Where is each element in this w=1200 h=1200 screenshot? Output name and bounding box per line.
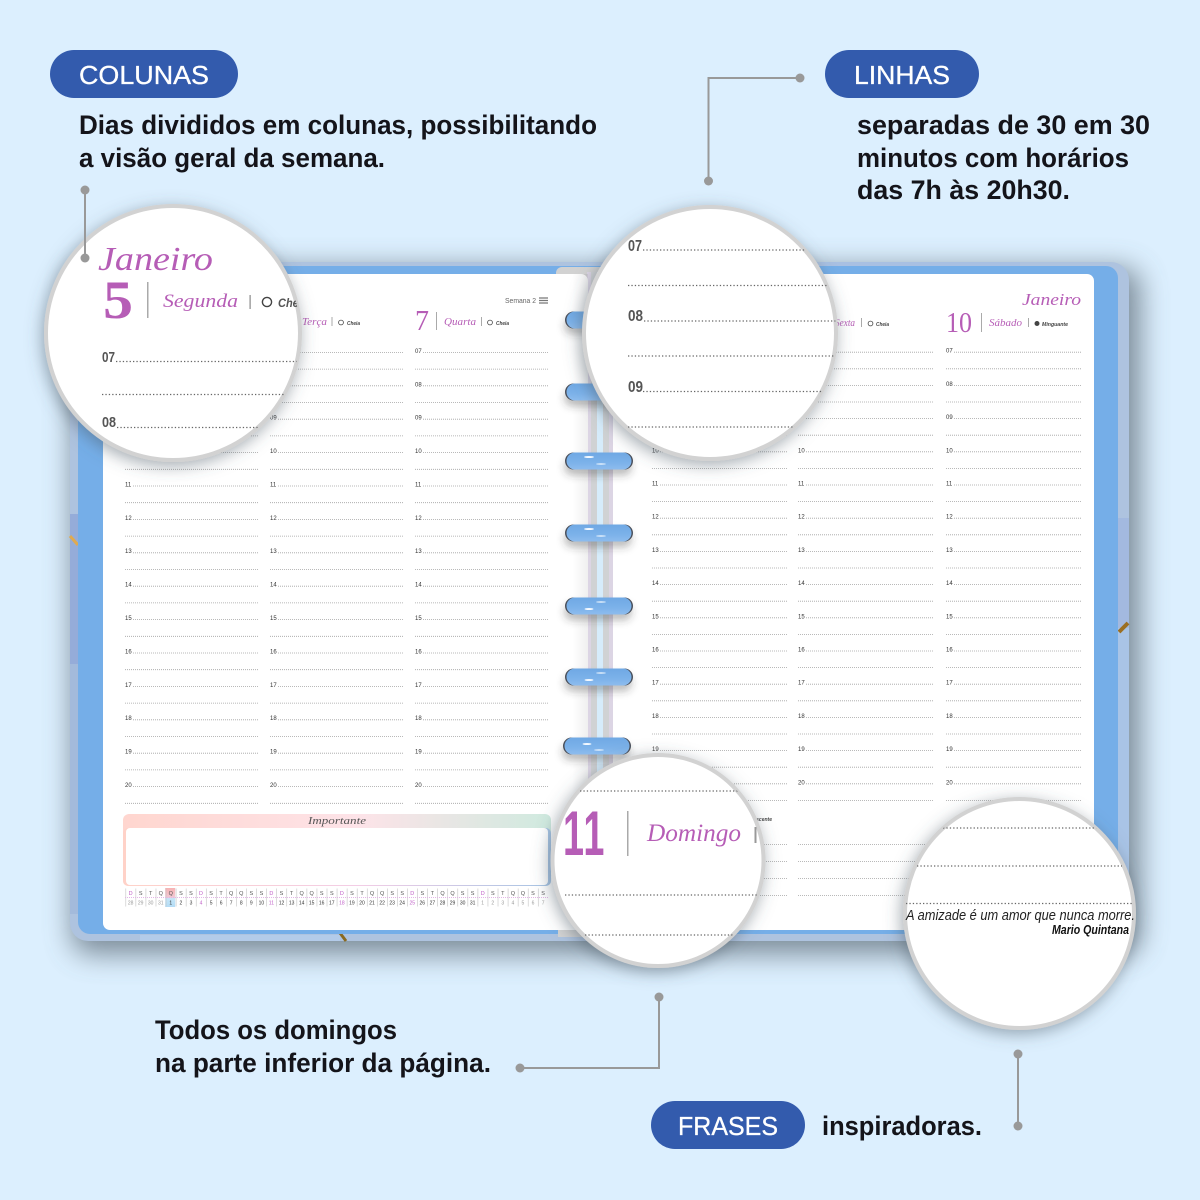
weekday letters: S xyxy=(400,891,404,897)
callout: linhas xyxy=(704,50,1150,205)
dotted lines xyxy=(628,250,839,427)
date numbers: 16 xyxy=(319,900,325,906)
right page hour labels: 13 xyxy=(652,548,659,554)
pill: colunas xyxy=(50,50,238,98)
weekday letters: T xyxy=(290,891,294,897)
tuesday header xyxy=(302,317,360,328)
right page hour labels: 07 xyxy=(652,349,659,355)
left page dotted hour lines xyxy=(125,352,548,803)
weekday letters: S xyxy=(320,891,324,897)
ring 7 xyxy=(563,738,631,754)
date numbers: 22 xyxy=(379,900,385,906)
tuesday header: Terça xyxy=(302,317,327,328)
right page hour labels: 17 xyxy=(946,681,953,687)
left page hour labels: 11 xyxy=(415,482,422,488)
left page hour labels: 16 xyxy=(270,649,277,655)
right page hour labels: 17 xyxy=(652,681,659,687)
day divider xyxy=(627,811,628,856)
mini calendar strip xyxy=(125,888,548,907)
left page hour labels: 10 xyxy=(125,449,132,455)
connector: frases xyxy=(1014,1050,1022,1130)
left page hour labels: 07 xyxy=(270,349,277,355)
date numbers: 7 xyxy=(542,900,545,906)
weekday letters: Q xyxy=(380,891,385,897)
left page hour labels: 13 xyxy=(125,549,132,555)
pill: frases: FRASES xyxy=(678,1111,778,1141)
right page hour labels: 18 xyxy=(798,714,805,720)
day divider xyxy=(147,282,148,318)
callout: domingos xyxy=(155,992,664,1078)
dotted lines xyxy=(906,828,1134,904)
hour 08: 08 xyxy=(102,414,116,431)
right page hour labels: 11 xyxy=(652,482,659,488)
right page hour labels: 09 xyxy=(946,415,953,421)
moon divider xyxy=(250,295,251,309)
weekday letters: S xyxy=(249,891,253,897)
date numbers: 15 xyxy=(309,900,315,906)
left page hour labels: 19 xyxy=(415,750,422,756)
hour 09: 09 xyxy=(628,379,643,396)
day number 11: 11 xyxy=(563,799,604,870)
date numbers: 29 xyxy=(450,900,455,906)
right page hour labels: 19 xyxy=(652,747,659,753)
left page hour labels: 15 xyxy=(270,616,277,622)
text: colunas description: a visão geral da semana. xyxy=(79,143,385,173)
date numbers: 4 xyxy=(200,900,203,906)
left page hour labels: 08 xyxy=(415,382,422,388)
date numbers: 3 xyxy=(501,900,504,906)
left page hour labels: 08 xyxy=(270,382,277,388)
date numbers: 10 xyxy=(259,900,264,906)
friday header: Cheia xyxy=(876,322,889,328)
weekday letters: Q xyxy=(310,891,315,897)
magnifier: sunday xyxy=(552,755,764,966)
weekday letters: Q xyxy=(229,891,234,897)
left page hour labels: 18 xyxy=(125,716,132,722)
ring 2 xyxy=(565,384,632,400)
weekday name: Domingo xyxy=(646,820,741,847)
left page hour labels: 09 xyxy=(125,416,132,422)
right page hour labels: 19 xyxy=(798,747,805,753)
text: linhas description: minutos com horários xyxy=(857,143,1129,173)
date numbers: 31 xyxy=(158,900,164,906)
left page hour labels: 08 xyxy=(125,382,132,388)
date numbers: 13 xyxy=(289,900,295,906)
weekday letters: S xyxy=(350,891,354,897)
saturday header: Minguante xyxy=(1042,322,1068,328)
ring 4 xyxy=(565,524,633,542)
right page hour labels: 13 xyxy=(946,548,953,554)
sunday section lines xyxy=(652,844,934,896)
weekday letters: Q xyxy=(159,891,164,897)
right page hour labels: 09 xyxy=(652,415,659,421)
weekday letters: S xyxy=(139,891,143,897)
wednesday header: Quarta xyxy=(444,317,476,328)
weekday letters: S xyxy=(209,891,213,897)
wednesday header: Cheia xyxy=(496,321,509,327)
right page hour labels: 18 xyxy=(946,714,953,720)
date numbers: 28 xyxy=(440,900,445,906)
left page column headers xyxy=(302,296,548,337)
left page hour labels: 12 xyxy=(415,516,422,522)
callout: colunas xyxy=(50,50,597,262)
right page hour labels: 10 xyxy=(652,448,659,454)
ring 1 xyxy=(565,312,632,328)
weekday letters: S xyxy=(179,891,183,897)
left page hour labels: 17 xyxy=(125,683,132,689)
friday header xyxy=(835,318,889,329)
weekday letters: T xyxy=(149,891,153,897)
left page hour labels: 11 xyxy=(125,482,132,488)
ring 5 xyxy=(565,598,633,614)
left page hour labels: 14 xyxy=(415,583,422,589)
left page hour labels: 13 xyxy=(270,549,277,555)
importante box: Importante xyxy=(307,815,366,827)
right page hour labels: 19 xyxy=(946,747,953,753)
left page hour labels: 14 xyxy=(125,583,132,589)
date numbers: 6 xyxy=(532,900,535,906)
date numbers: 25 xyxy=(410,900,415,906)
weekday letters: S xyxy=(491,891,495,897)
left page hour labels: 15 xyxy=(415,616,422,622)
planner book xyxy=(70,262,1140,954)
left page hour labels: 12 xyxy=(125,516,132,522)
wednesday header xyxy=(415,305,509,337)
date numbers: 2 xyxy=(180,900,183,906)
right page hour labels: 10 xyxy=(946,448,953,454)
weekday letters: D xyxy=(269,891,273,897)
date numbers: 14 xyxy=(299,900,305,906)
right page hour labels: 11 xyxy=(946,482,953,488)
date numbers: 17 xyxy=(329,900,335,906)
right page hour labels: 08 xyxy=(652,382,659,388)
date numbers: 1 xyxy=(169,900,172,906)
right page hour labels: 12 xyxy=(798,515,805,521)
right page hour labels: 12 xyxy=(652,515,659,521)
magnifier: lines xyxy=(584,207,839,459)
quote text: A amizade é um amor que nunca morre. xyxy=(905,907,1135,924)
right page dotted hour lines xyxy=(652,352,1082,800)
text: domingos description xyxy=(155,1015,491,1078)
left page hour labels: 15 xyxy=(125,616,132,622)
left page hour labels: 20 xyxy=(270,783,277,789)
text: linhas description: separadas de 30 em 30 xyxy=(857,110,1150,140)
weekday letters: D xyxy=(410,891,414,897)
left page hour labels: 18 xyxy=(270,716,277,722)
quote author: Mario Quintana xyxy=(1052,922,1129,937)
date numbers: 23 xyxy=(389,900,395,906)
pill: linhas xyxy=(825,50,979,98)
left page hour labels: 17 xyxy=(415,683,422,689)
saturday header: 10 xyxy=(946,307,972,339)
right page hour labels: 20 xyxy=(652,780,659,786)
date numbers: 19 xyxy=(349,900,355,906)
magnifier: columns xyxy=(46,206,308,460)
weekday letters: S xyxy=(471,891,475,897)
right page hour labels: 18 xyxy=(652,714,659,720)
date numbers: 30 xyxy=(148,900,154,906)
importante box xyxy=(123,814,551,886)
pill: frases xyxy=(651,1101,805,1149)
weekday letters: Q xyxy=(299,891,304,897)
right page hour labels: 09 xyxy=(798,415,805,421)
date numbers: 29 xyxy=(138,900,144,906)
ring 3 xyxy=(565,452,633,470)
right page hour labels: 16 xyxy=(652,648,659,654)
left page hour labels: 14 xyxy=(270,583,277,589)
left page hour labels: 20 xyxy=(125,783,132,789)
right page hour labels: 15 xyxy=(798,614,805,620)
date numbers: 8 xyxy=(240,900,243,906)
weekday letters: S xyxy=(420,891,424,897)
text: domingos description: na parte inferior da página. xyxy=(155,1048,491,1078)
date numbers: 6 xyxy=(220,900,223,906)
date numbers: 12 xyxy=(279,900,284,906)
date numbers: 5 xyxy=(210,900,213,906)
right page xyxy=(613,274,1094,930)
friday header: Sexta xyxy=(835,318,855,329)
weekday letters: Q xyxy=(521,891,526,897)
right page hour labels: 08 xyxy=(946,382,953,388)
right page hour labels: 14 xyxy=(946,581,953,587)
magnifier: quote xyxy=(905,799,1135,1028)
weekday letters: T xyxy=(360,891,364,897)
text: colunas description: Dias divididos em colunas, possibilitando xyxy=(79,110,597,140)
weekday letters: D xyxy=(481,891,485,897)
weekday letters: S xyxy=(330,891,334,897)
weekday letters: Q xyxy=(450,891,455,897)
month title: Janeiro xyxy=(98,241,213,278)
date numbers: 5 xyxy=(522,900,525,906)
pill: colunas: COLUNAS xyxy=(79,60,209,90)
moon icon xyxy=(262,297,272,307)
book cover xyxy=(70,262,1129,941)
day number 5: 5 xyxy=(103,270,133,330)
left page hour labels: 19 xyxy=(125,750,132,756)
text: domingos description: Todos os domingos xyxy=(155,1015,397,1045)
weekday letters: S xyxy=(390,891,394,897)
text: inspiradoras: inspiradoras. xyxy=(822,1111,982,1141)
left page hour labels: 10 xyxy=(415,449,422,455)
date numbers: 31 xyxy=(470,900,476,906)
weekday letters: S xyxy=(531,891,535,897)
right page hour labels xyxy=(652,349,953,786)
right page hour labels: 20 xyxy=(798,780,805,786)
weekday letters: D xyxy=(340,891,344,897)
right page hour labels: 13 xyxy=(798,548,805,554)
dotted lines xyxy=(102,362,301,428)
date numbers: 2 xyxy=(491,900,494,906)
date numbers: 18 xyxy=(339,900,345,906)
date numbers: 21 xyxy=(369,900,375,906)
connector: domingos xyxy=(516,992,664,1072)
date numbers: 30 xyxy=(460,900,466,906)
date numbers: 27 xyxy=(430,900,435,906)
right page hour labels: 15 xyxy=(652,614,659,620)
connector: colunas xyxy=(80,186,90,262)
ring 6 xyxy=(565,668,633,686)
callout: frases xyxy=(651,1050,1022,1149)
right page hour labels: 20 xyxy=(946,780,953,786)
date numbers: 4 xyxy=(512,900,515,906)
left page hour labels: 19 xyxy=(270,750,277,756)
right page hour labels: 16 xyxy=(946,648,953,654)
dotted lines xyxy=(565,791,760,935)
right page hour labels: 10 xyxy=(798,448,805,454)
hour 07: 07 xyxy=(628,238,642,255)
date numbers: 26 xyxy=(420,900,425,906)
weekday letters: Q xyxy=(511,891,516,897)
date numbers: 3 xyxy=(190,900,193,906)
date numbers: 24 xyxy=(399,900,405,906)
left page xyxy=(103,274,588,930)
hour 08: 08 xyxy=(628,308,643,325)
weekday letters: D xyxy=(129,891,133,897)
date numbers: 11 xyxy=(269,900,274,906)
weekday letters: S xyxy=(260,891,264,897)
moon label: Cheia xyxy=(278,296,308,310)
weekday letters: T xyxy=(431,891,435,897)
weekday letters: Q xyxy=(370,891,375,897)
tuesday header: Cheia xyxy=(347,321,360,327)
weekday letters: T xyxy=(501,891,505,897)
connector: linhas xyxy=(704,74,804,186)
right page hour labels: 07 xyxy=(798,349,805,355)
left page hour labels: 07 xyxy=(415,349,422,355)
left page hour labels: 16 xyxy=(125,649,132,655)
right page hour labels: 12 xyxy=(946,515,953,521)
left page hour labels xyxy=(125,349,422,789)
left page hour labels: 18 xyxy=(415,716,422,722)
spine band xyxy=(587,272,613,932)
left page hour labels: 13 xyxy=(415,549,422,555)
date numbers: 20 xyxy=(359,900,365,906)
binder rings xyxy=(563,312,633,754)
page stack edges xyxy=(556,267,608,937)
left page hour labels: 10 xyxy=(270,449,277,455)
date numbers: 28 xyxy=(128,900,134,906)
right page hour labels: 08 xyxy=(798,382,805,388)
weekday letters: Q xyxy=(440,891,445,897)
weekday letters: S xyxy=(541,891,545,897)
weekday letters: D xyxy=(199,891,203,897)
saturday header xyxy=(946,307,1068,339)
weekday letters: S xyxy=(280,891,284,897)
right page hour labels: 14 xyxy=(798,581,805,587)
moon divider xyxy=(754,827,756,843)
right page hour labels: 07 xyxy=(946,349,953,355)
date numbers: 9 xyxy=(250,900,253,906)
weekday letters: Q xyxy=(169,891,174,897)
left page hour labels: 16 xyxy=(415,649,422,655)
right page hour labels: 15 xyxy=(946,614,953,620)
left page hour labels: 20 xyxy=(415,783,422,789)
right page month title: Janeiro xyxy=(1022,290,1081,309)
weekday name: Segunda xyxy=(163,291,238,312)
saturday header: Sábado xyxy=(989,318,1022,329)
sunday section moon label: Crescente xyxy=(748,817,772,823)
text: colunas description xyxy=(79,110,597,173)
pill: linhas: LINHAS xyxy=(854,60,950,90)
left page hour labels: 17 xyxy=(270,683,277,689)
left page hour labels: 09 xyxy=(415,416,422,422)
left page hour labels: 11 xyxy=(270,482,277,488)
weekday letters: Q xyxy=(239,891,244,897)
wednesday header: 7 xyxy=(415,305,429,337)
hour 07: 07 xyxy=(102,349,115,366)
weekday letters: T xyxy=(219,891,223,897)
left page hour labels: 09 xyxy=(270,416,277,422)
date numbers: 7 xyxy=(230,900,233,906)
right page hour labels: 11 xyxy=(798,482,805,488)
right page hour labels: 16 xyxy=(798,648,805,654)
weekday letters: S xyxy=(461,891,465,897)
right page hour labels: 14 xyxy=(652,581,659,587)
book drop shadow xyxy=(72,268,1140,954)
date numbers: 1 xyxy=(481,900,484,906)
text: linhas description: das 7h às 20h30. xyxy=(857,175,1070,205)
weekday letters: S xyxy=(189,891,193,897)
left page hour labels: 12 xyxy=(270,516,277,522)
text: linhas description xyxy=(857,110,1150,205)
week label: Semana 2 xyxy=(505,296,536,305)
left page hour labels: 07 xyxy=(125,349,132,355)
right page hour labels: 17 xyxy=(798,681,805,687)
